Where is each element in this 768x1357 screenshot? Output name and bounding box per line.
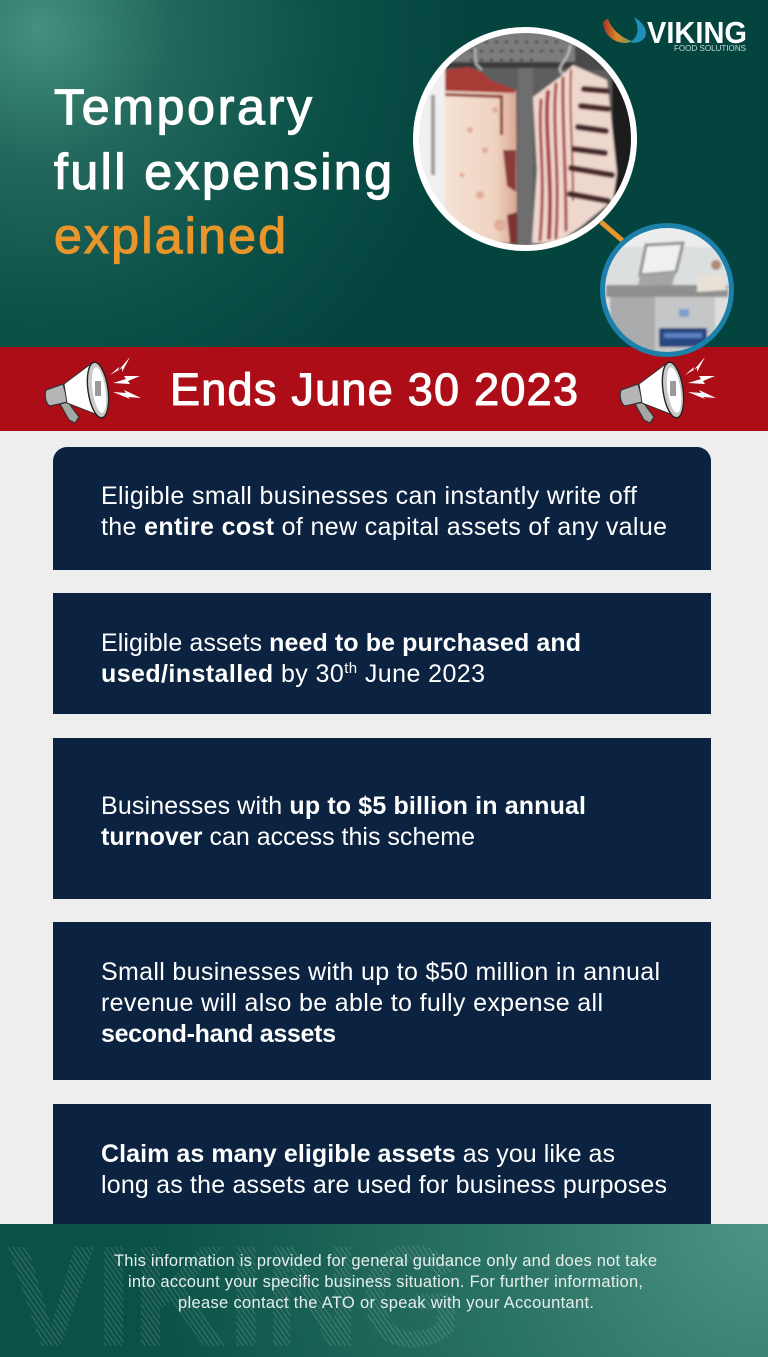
title: explained <box>54 208 286 264</box>
banner <box>0 347 768 431</box>
logo wordmark: VIKING <box>647 15 747 50</box>
panel: card 4 <box>53 922 711 1080</box>
panel: card 2: used/installed by 30 <box>101 660 344 688</box>
footer panel <box>0 1224 768 1357</box>
panel: card 1: Eligible small businesses can instantly write off <box>101 482 637 510</box>
icon: megaphone right <box>620 357 716 423</box>
panel: card 2 <box>53 593 711 714</box>
photo: hanging meat in circle <box>413 27 638 255</box>
panel: card 5: long as the assets are used for business purposes <box>101 1171 667 1199</box>
connector line between photos <box>601 222 623 241</box>
panel: card 4: revenue will also be able to fully expense all <box>101 989 603 1017</box>
panel: card 4: Small businesses with up to $50 million in annual <box>101 958 660 986</box>
footer disclaimer: This information is provided for general guidance only and does not take <box>114 1252 657 1270</box>
panel: card 4: second-hand assets <box>101 1020 336 1048</box>
icon: logo swoosh <box>603 17 646 43</box>
panel: card 1 <box>53 447 711 570</box>
title <box>54 79 392 264</box>
panel: card 5 <box>53 1104 711 1225</box>
photo: vacuum packing machine in circle <box>600 223 735 362</box>
logo: Viking Food Solutions <box>603 15 747 53</box>
panel: card 3: turnover can access this scheme <box>101 823 475 851</box>
title: Temporary <box>54 79 312 135</box>
panel: card 2: th <box>344 660 357 677</box>
panel: card 3: Businesses with up to $5 billion in annual <box>101 792 586 820</box>
panel: card 3 <box>53 738 711 899</box>
footer disclaimer: into account your specific business situation. For further information, <box>128 1273 643 1291</box>
title: full expensing <box>54 144 392 200</box>
panel: card 2: Eligible assets need to be purchased and <box>101 629 581 657</box>
icon: megaphone left <box>45 357 141 423</box>
banner heading: Ends June 30 2023 <box>170 364 578 415</box>
logo tagline: FOOD SOLUTIONS <box>674 44 746 53</box>
panel: card 5: Claim as many eligible assets as you like as <box>101 1140 615 1168</box>
footer disclaimer: please contact the ATO or speak with your Accountant. <box>178 1294 594 1312</box>
footer disclaimer <box>114 1252 657 1312</box>
panel: card 2: June 2023 <box>358 660 485 688</box>
panel: card 1: the entire cost of new capital assets of any value <box>101 513 667 541</box>
header panel <box>0 0 768 348</box>
